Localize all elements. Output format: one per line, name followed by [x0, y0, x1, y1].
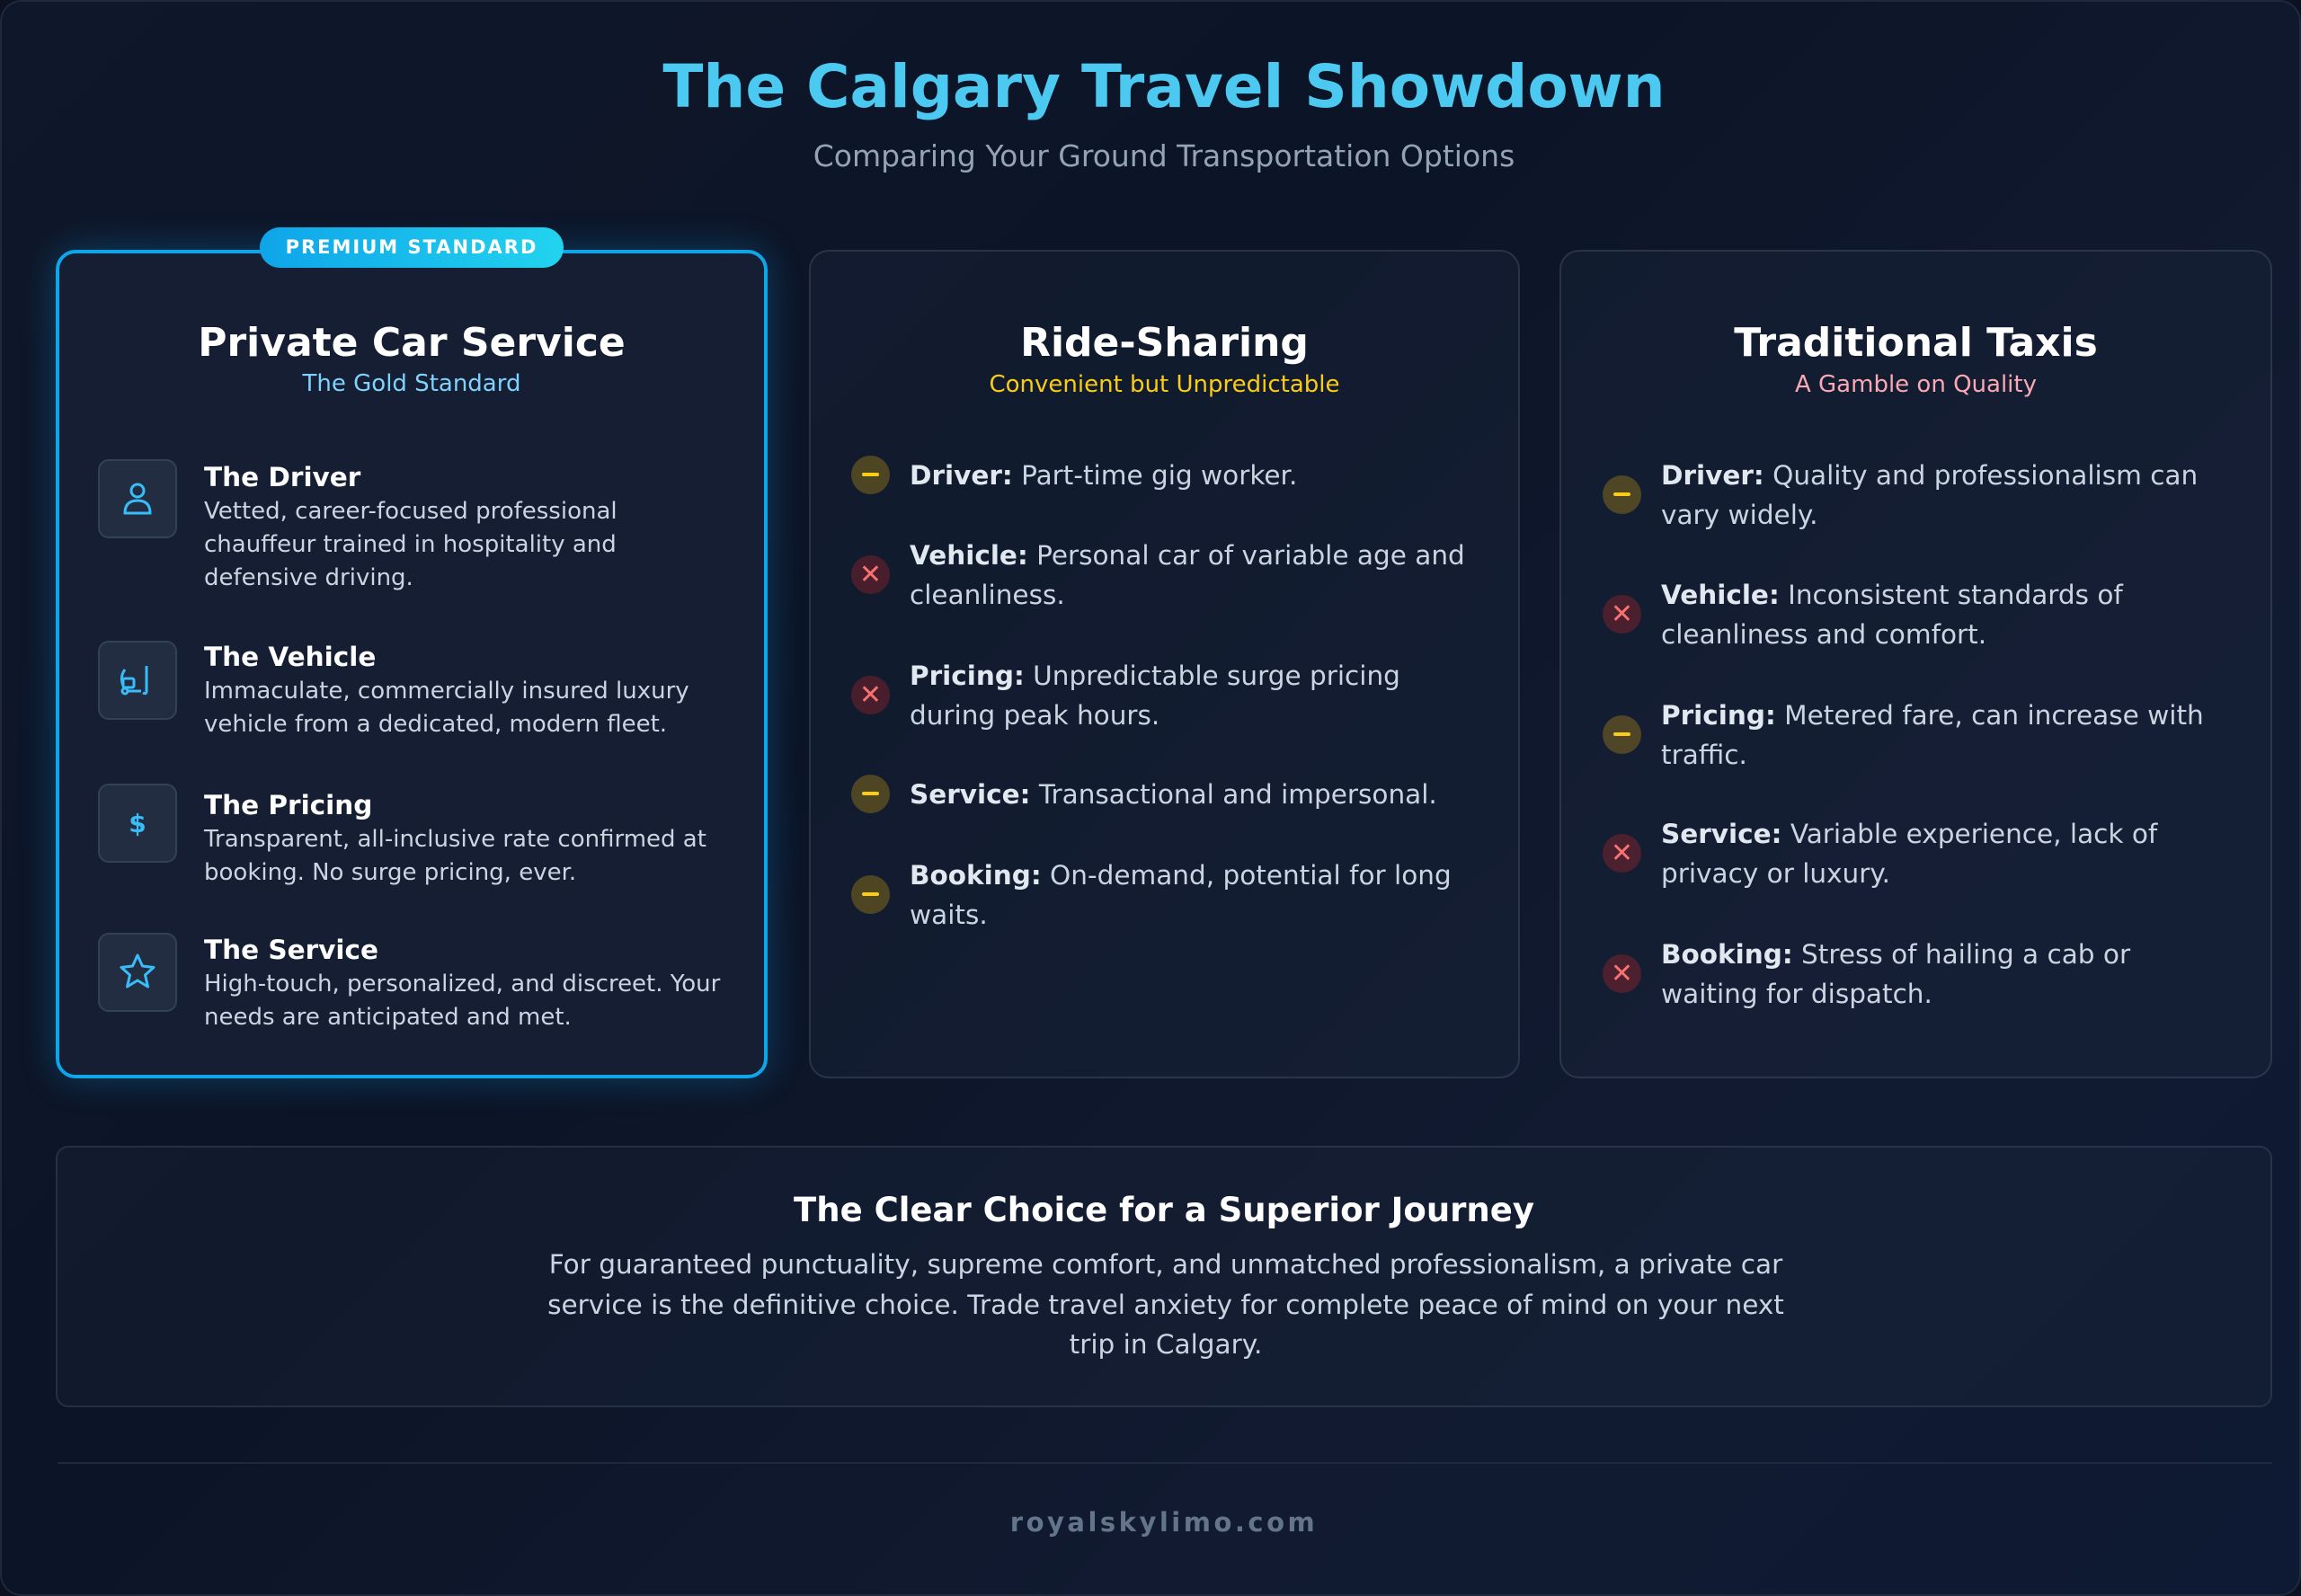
text: Transparent, all-inclusive rate confirmed at booking. No surge pricing, ever.	[204, 826, 706, 886]
text	[203, 790, 706, 886]
item: booking	[851, 860, 1452, 930]
item: vehicle	[98, 641, 689, 738]
subtitle: Comparing Your Ground Transportation Options	[813, 138, 1515, 173]
item: pricing	[98, 784, 706, 886]
item: driver	[98, 459, 617, 591]
text	[204, 462, 617, 591]
item: driver	[1603, 460, 2198, 530]
title: The Calgary Travel Showdown	[662, 52, 1666, 121]
text: The Driver	[204, 462, 360, 492]
panel: traditional taxis: Pricing: Metered fare, can increase with traffic.	[1661, 700, 2204, 770]
subheading: The Gold Standard	[303, 370, 520, 397]
panel: ride-sharing	[809, 250, 1520, 1078]
icon: vehicle	[98, 641, 177, 720]
panel: ride-sharing: Driver: Part-time gig worker.	[910, 460, 1297, 491]
panel: ride-sharing: Booking: On-demand, potential for long waits.	[910, 860, 1452, 930]
panel: traditional taxis: ✕	[1611, 958, 1633, 989]
panel: ride-sharing: Pricing: Unpredictable surge pricing during peak hours.	[910, 661, 1400, 731]
icon: star	[98, 933, 177, 1012]
panel: ride-sharing: ✕	[859, 559, 882, 590]
icon: person	[98, 459, 177, 538]
panel: traditional taxis: Vehicle: Inconsistent standards of cleanliness and comfort.	[1661, 580, 2123, 650]
panel: ride-sharing: Vehicle: Personal car of variable age and cleanliness.	[910, 540, 1465, 610]
panel: traditional taxis: Service: Variable experience, lack of privacy or luxury.	[1661, 819, 2157, 889]
conclusion text: For guaranteed punctuality, supreme comfort, and unmatched professionalism, a private car service is the definitive choice. Trade travel anxiety for complete peace of mind on your next trip in Calgary.	[547, 1249, 1784, 1360]
item: pricing	[1603, 700, 2204, 770]
heading: Traditional Taxis	[1734, 320, 2098, 366]
footer: website: royalskylimo.com	[1010, 1507, 1318, 1538]
panel: traditional taxis: ✕	[1611, 838, 1633, 869]
panel: private car service	[56, 250, 768, 1078]
badge: premium standard: PREMIUM STANDARD	[286, 236, 537, 258]
item: service	[98, 933, 721, 1031]
heading: Ride-Sharing	[1020, 320, 1309, 366]
item: service	[1603, 819, 2158, 889]
item: vehicle	[1603, 580, 2123, 650]
text: High-touch, personalized, and discreet. Your needs are anticipated and met.	[204, 971, 720, 1031]
panel: ride-sharing: Service: Transactional and impersonal.	[910, 779, 1437, 810]
item: booking	[1603, 939, 2130, 1009]
icon: dollar	[98, 784, 177, 863]
panel: traditional taxis: Booking: Stress of hailing a cab or waiting for dispatch.	[1661, 939, 2130, 1009]
panel: traditional taxis: Driver: Quality and professionalism can vary widely.	[1661, 460, 2198, 530]
badge: premium standard	[260, 227, 564, 268]
item: pricing	[851, 661, 1400, 731]
panel: conclusion	[56, 1146, 2272, 1407]
icon: dollar: $	[129, 809, 147, 838]
panel: traditional taxis	[1559, 250, 2272, 1078]
heading: Private Car Service	[198, 320, 626, 366]
item: driver	[851, 456, 1297, 494]
conclusion heading: The Clear Choice for a Superior Journey	[794, 1191, 1534, 1229]
subheading: Convenient but Unpredictable	[989, 371, 1339, 398]
item: service	[851, 775, 1437, 813]
text	[204, 642, 689, 738]
panel: traditional taxis: ✕	[1611, 598, 1633, 630]
text: Immaculate, commercially insured luxury vehicle from a dedicated, modern fleet.	[204, 678, 689, 738]
subheading: A Gamble on Quality	[1795, 371, 2037, 398]
text	[204, 935, 721, 1031]
text: chauffeur trained in hospitality and defensive driving.	[204, 531, 617, 591]
text: Vetted, career-focused professional	[204, 498, 617, 525]
panel: ride-sharing: ✕	[859, 679, 882, 711]
text: The Service	[204, 935, 378, 965]
text: The Pricing	[204, 790, 372, 820]
text: The Vehicle	[204, 642, 376, 672]
item: vehicle	[851, 540, 1465, 610]
